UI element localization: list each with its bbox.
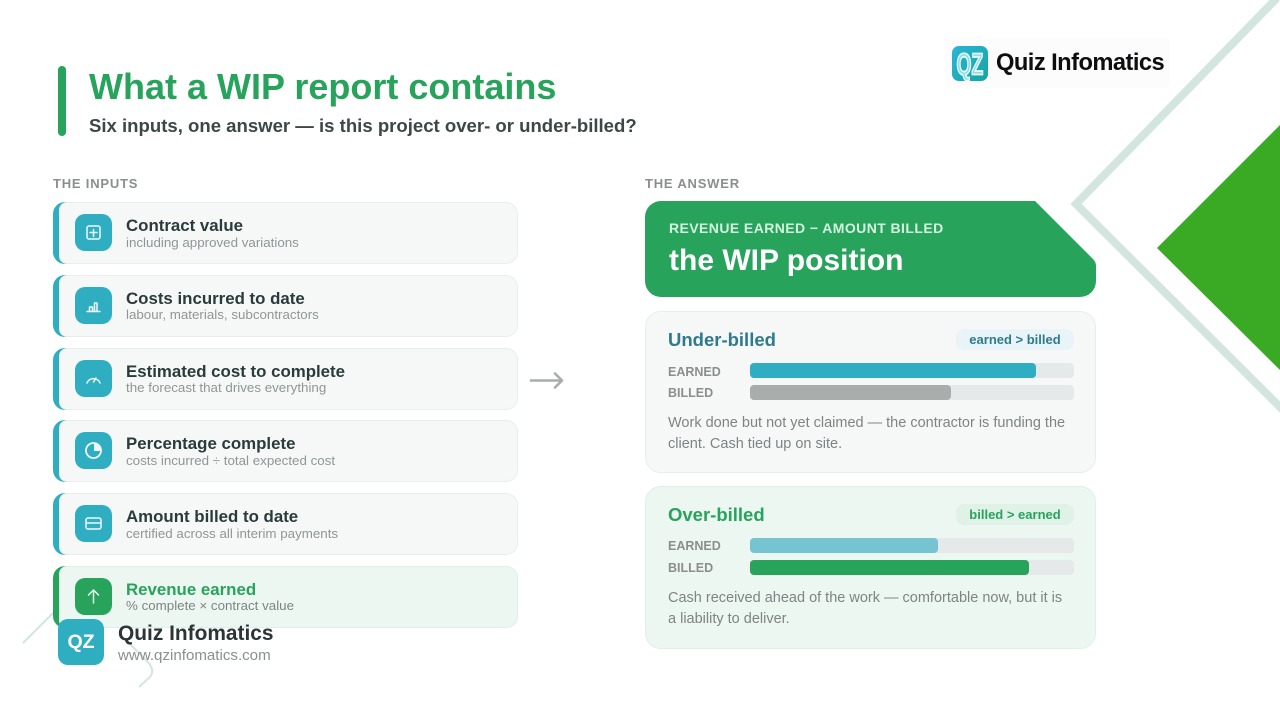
- arrow: inputs to answer: [530, 372, 564, 389]
- heading: Under-billed: [668, 329, 776, 350]
- answer banner: [645, 201, 1096, 297]
- label: Estimated cost to complete: [126, 362, 345, 381]
- heading: Over-billed: [668, 504, 765, 525]
- icon: bar chart: [75, 287, 112, 324]
- subtitle: Six inputs, one answer — is this project over- or under-billed?: [89, 115, 637, 136]
- logo: Quiz Infomatics top right: [945, 38, 1170, 88]
- input: costs incurred: [53, 275, 518, 337]
- pill: [956, 329, 1074, 350]
- heading: the answer: THE ANSWER: [645, 176, 740, 191]
- sublabel: the forecast that drives everything: [126, 380, 326, 395]
- pill: earned > billed: [969, 332, 1061, 347]
- icon: up arrow: [75, 578, 112, 615]
- label earned: EARNED: [668, 539, 721, 553]
- input: percentage complete: [53, 420, 518, 482]
- panel: over-billed: [645, 486, 1096, 649]
- description: Cash received ahead of the work — comfortable now, but it is a liability to deliver.: [668, 590, 1062, 626]
- label: Costs incurred to date: [126, 289, 305, 308]
- icon: card: [75, 505, 112, 542]
- icon: pie: [75, 432, 112, 469]
- footer logo badge: QZ: [67, 631, 95, 653]
- logo mark: QZ: [956, 48, 983, 81]
- card face tint: [59, 566, 518, 628]
- pill: [956, 504, 1074, 525]
- label: Percentage complete: [126, 434, 295, 453]
- bar billed: [750, 385, 1074, 400]
- icon: plus box: [75, 214, 112, 251]
- label billed: BILLED: [668, 386, 713, 400]
- sublabel: including approved variations: [126, 235, 299, 250]
- input: revenue earned: [53, 566, 518, 628]
- description: Work done but not yet claimed — the contractor is funding the client. Cash tied up on site.: [668, 415, 1065, 452]
- logo wordmark: Quiz Infomatics: [996, 50, 1164, 76]
- logo mark: [952, 46, 988, 81]
- sublabel: labour, materials, subcontractors: [126, 307, 319, 322]
- sublabel: % complete × contract value: [126, 598, 294, 613]
- label billed: BILLED: [668, 561, 713, 575]
- label: Contract value: [126, 216, 243, 235]
- pill: billed > earned: [969, 507, 1061, 522]
- banner formula: REVENUE EARNED − AMOUNT BILLED: [669, 220, 944, 236]
- title: What a WIP report contains: [89, 66, 556, 107]
- sublabel: costs incurred ÷ total expected cost: [126, 453, 335, 468]
- label: Amount billed to date: [126, 507, 298, 526]
- footer url: www.qzinfomatics.com: [118, 647, 271, 664]
- bar earned: [750, 363, 1074, 378]
- label: Revenue earned: [126, 580, 256, 599]
- title accent bar: [58, 66, 66, 136]
- icon: gauge: [75, 360, 112, 397]
- banner heading: the WIP position: [669, 244, 903, 277]
- heading: the inputs: THE INPUTS: [53, 176, 138, 191]
- input: estimated cost: [53, 348, 518, 410]
- sublabel: certified across all interim payments: [126, 526, 338, 541]
- brand footer: [58, 619, 274, 665]
- bar billed: [750, 560, 1074, 575]
- panel: under-billed: [645, 311, 1096, 473]
- input: amount billed: [53, 493, 518, 555]
- bar earned: [750, 538, 1074, 553]
- footer name: Quiz Infomatics: [118, 622, 274, 645]
- label earned: EARNED: [668, 365, 721, 379]
- input: contract value: [53, 202, 518, 264]
- footer logo badge: [58, 619, 104, 665]
